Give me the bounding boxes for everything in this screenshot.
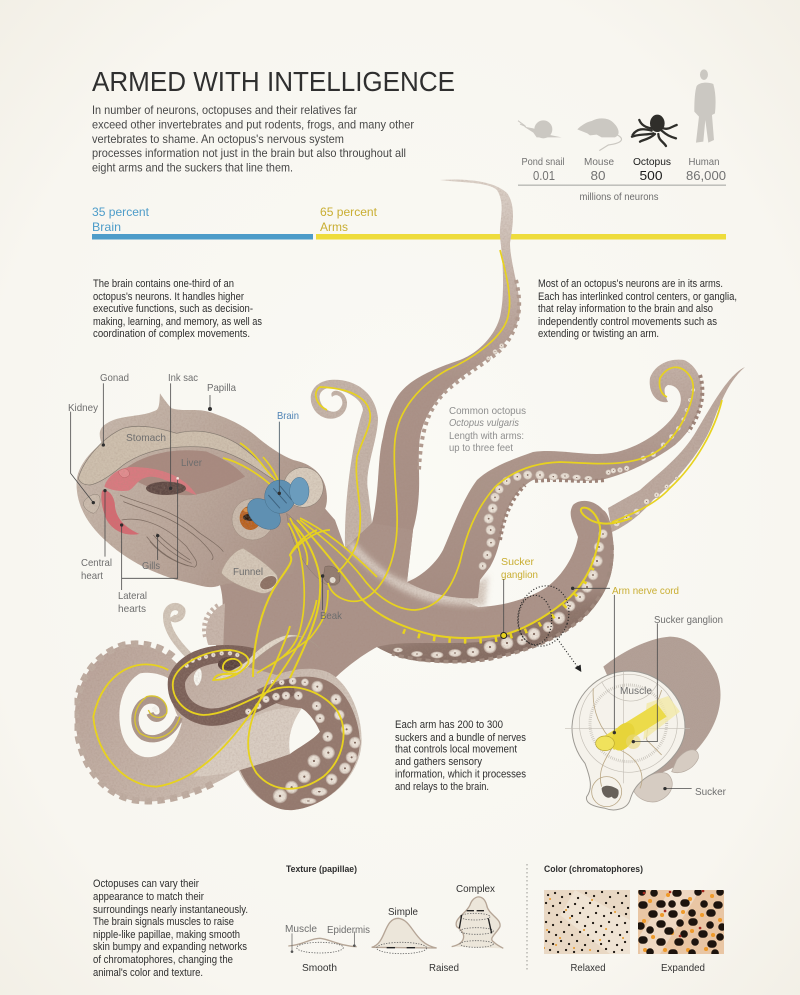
small curled arm: [311, 380, 378, 560]
muscle and epidermis labels: Muscle: [285, 924, 317, 935]
organ: ink sac: [146, 482, 186, 495]
appearance text: [93, 878, 248, 979]
anatomy labels: Liver: [181, 458, 203, 469]
neuron comparison chart: [518, 69, 726, 203]
back suckers: [633, 750, 698, 802]
appearance text: surroundings nearly instantaneously.: [93, 904, 248, 916]
eye bump: [283, 467, 323, 507]
icon: human: [694, 69, 716, 143]
leader dots: [571, 587, 667, 790]
organ: liver: [122, 450, 245, 495]
detail labels: Arm nerve cord: [612, 586, 679, 597]
scalloped coil edge: [76, 644, 213, 801]
organ: gill hearts: [104, 467, 197, 495]
tall arm nerve: [328, 250, 510, 601]
complex papilla: [452, 897, 503, 948]
head and mantle: [77, 393, 340, 593]
sucker cross-section detail: [510, 579, 721, 810]
pale shoulder where arms join: [347, 540, 488, 606]
small spiral arm: [135, 700, 179, 739]
swatch labels: Relaxed: [570, 963, 606, 974]
muscle and epidermis labels: Epidermis: [327, 925, 370, 936]
appearance text: animal's color and texture.: [93, 967, 203, 979]
arms text: [538, 278, 737, 340]
intro text: vertebrates to shame. An octopus's nervous system: [92, 132, 344, 146]
middle arm suckers: [478, 465, 630, 570]
axis unit: millions of neurons: [580, 192, 658, 203]
intro text: exceed other invertebrates and put rodents, frogs, and many other: [92, 118, 414, 132]
sucker ganglion callout: Sucker: [501, 557, 535, 568]
leader dots: [92, 407, 324, 578]
arms share: [316, 205, 726, 240]
muscle and epidermis labels: [285, 924, 370, 936]
pale small arm behind coils: [167, 607, 190, 657]
upper coil band: [176, 654, 293, 717]
diagram labels: Raised: [429, 963, 459, 974]
appearance text: appearance to match their: [93, 891, 204, 903]
sucker ganglion callout: [501, 557, 538, 638]
brain text: making, learning, and memory, as well as: [93, 316, 262, 328]
main arm nerve cord: [297, 508, 632, 638]
intro text: processes information not just in the brain but also throughout all: [92, 146, 406, 160]
species caption: Length with arms:: [449, 431, 524, 442]
arm text block: [395, 719, 526, 793]
arms text: Each has interlinked control centers, or ganglia,: [538, 291, 737, 303]
species labels: Octopus: [633, 157, 671, 168]
lower left coils: [75, 603, 362, 810]
zoom ring and arrow: [510, 579, 579, 669]
anatomy labels: hearts: [118, 604, 146, 615]
arms share: 65 percent: [320, 205, 378, 219]
swatch: expanded: [638, 890, 724, 954]
coil suckers: [184, 651, 361, 804]
neuron counts: 0.01: [533, 168, 555, 183]
intro text: In number of neurons, octopuses and their relatives far: [92, 103, 357, 117]
swatch labels: [570, 963, 705, 974]
detail labels: [612, 586, 727, 798]
anatomy labels: Beak: [320, 611, 343, 622]
coil silhouette: [75, 644, 362, 810]
brain: [242, 477, 309, 536]
anatomy leader lines: [71, 383, 323, 610]
organ: gills: [120, 495, 223, 567]
anatomy labels: Kidney: [68, 403, 99, 414]
outer arm skin: [603, 637, 721, 777]
neuron counts: 86,000: [686, 168, 726, 183]
brain text: executive functions, such as decision-: [93, 303, 253, 315]
anatomy labels: Papilla: [207, 383, 236, 394]
octopus illustration: [68, 180, 745, 810]
sucker ganglion callout: ganglion: [501, 570, 538, 581]
proportion bars: [92, 205, 726, 240]
anatomy labels: Ink sac: [168, 373, 198, 384]
diagram labels: Complex: [456, 884, 496, 895]
species labels: Human: [688, 157, 720, 168]
brain text: coordination of complex movements.: [93, 328, 250, 340]
detail labels: Sucker ganglion: [654, 615, 723, 626]
panel: texture papillae: [285, 864, 503, 974]
species caption: Common octopus: [449, 406, 526, 417]
species labels: [522, 157, 720, 168]
arm text block: information, which it processes: [395, 768, 526, 780]
outer arm suckers: [486, 343, 696, 527]
nerves of the arms: [93, 250, 722, 789]
tall arm: [372, 180, 520, 582]
arms share: Arms: [320, 220, 348, 234]
arms text: independently control movements such as: [538, 316, 717, 328]
papilla diagrams: [288, 897, 503, 954]
appearance text: The brain signals muscles to raise: [93, 916, 234, 928]
arm text block: Each arm has 200 to 300: [395, 719, 503, 731]
central body and big lower arm: [214, 480, 614, 700]
brain nerve fan: [223, 443, 377, 678]
small arm nerve: [316, 387, 370, 572]
neuron counts: 500: [640, 168, 662, 183]
arms text: that relay information to the brain and also: [538, 303, 713, 315]
big arm suckers: [393, 529, 608, 658]
anatomy labels: Gonad: [100, 373, 129, 384]
diagram labels: Simple: [388, 907, 418, 918]
neuron counts: [533, 168, 726, 183]
anatomy labels: Funnel: [233, 567, 263, 578]
illustrated octopus body and arms: [75, 180, 745, 810]
coil nerves: [93, 600, 344, 789]
arm text block: and relays to the brain.: [395, 781, 489, 793]
appearance text: Octopuses can vary their: [93, 878, 199, 890]
sucker ganglia along the cord: [403, 555, 597, 641]
arm text block: that controls local movement: [395, 744, 517, 756]
middle curled arm: [407, 360, 702, 598]
detail labels: Muscle: [620, 686, 652, 697]
dark lower band of big arm: [377, 512, 614, 663]
appearance text: skin bumpy and expanding networks: [93, 941, 247, 953]
intro text: eight arms and the suckers that line them.: [92, 160, 293, 174]
appearance text: of chromatophores, changing the: [93, 954, 233, 966]
arms text: extending or twisting an arm.: [538, 328, 659, 340]
arrow head: [575, 665, 581, 672]
swatch: relaxed: [544, 890, 630, 954]
detail labels: Sucker: [695, 787, 727, 798]
color heading: Color (chromatophores): [544, 864, 643, 874]
diagram labels: [302, 884, 496, 974]
muscle rings: [565, 672, 690, 783]
sucker cup: [602, 786, 619, 799]
thin arm nerve: [612, 400, 722, 522]
anatomy labels: Stomach: [126, 433, 166, 444]
light web: [193, 708, 302, 777]
funnel: [222, 548, 280, 593]
neuron counts: 80: [590, 168, 606, 183]
intro text: [92, 103, 414, 174]
brain text: [93, 278, 262, 340]
panel divider: [526, 864, 528, 970]
appearance text: nipple-like papillae, making smooth: [93, 929, 240, 941]
brain share: Brain: [92, 220, 121, 234]
brain text: The brain contains one-third of an: [93, 278, 234, 290]
icon: mouse: [577, 118, 622, 151]
arms text: Most of an octopus's neurons are in its arms.: [538, 278, 723, 290]
pale arm tip over coils: [213, 635, 320, 680]
texture heading: Texture (papillae): [286, 864, 357, 874]
arm text block: suckers and a bundle of nerves: [395, 732, 526, 744]
simple papilla: [372, 918, 437, 954]
brain share: [92, 205, 313, 240]
anatomy labels: Gills: [142, 561, 160, 572]
panel: color chromatophores: [544, 864, 724, 974]
swatch labels: Expanded: [661, 963, 705, 974]
thin right arm: [608, 367, 745, 532]
species labels: Pond snail: [522, 157, 564, 168]
dark right loop underside: [240, 677, 360, 810]
icon: pond snail: [518, 120, 562, 138]
icon: octopus: [632, 115, 677, 146]
cross-section disc: [572, 671, 685, 810]
species labels: Mouse: [584, 157, 614, 168]
anatomy labels: [68, 373, 343, 622]
anatomy labels: Central: [81, 558, 112, 569]
species caption: [449, 406, 526, 454]
title: ARMED WITH INTELLIGENCE: [92, 66, 455, 97]
anatomy labels: Lateral: [118, 591, 147, 602]
brain share: 35 percent: [92, 205, 150, 219]
eye: [232, 499, 273, 540]
beak: [287, 513, 340, 586]
species caption: up to three feet: [449, 443, 513, 454]
brain text: octopus's neurons. It handles higher: [93, 291, 244, 303]
organ: stomach band: [78, 426, 273, 485]
detail leader lines: [573, 588, 692, 789]
organ: kidney: [83, 494, 100, 513]
middle arm nerve: [300, 367, 693, 610]
brain label: Brain: [277, 411, 299, 422]
species caption: Octopus vulgaris: [449, 418, 519, 429]
nerve cord: [596, 696, 680, 755]
anatomy labels: heart: [81, 571, 103, 582]
arm text block: and gathers sensory: [395, 756, 483, 768]
smooth papilla: [288, 932, 357, 953]
diagram labels: Smooth: [302, 963, 337, 974]
